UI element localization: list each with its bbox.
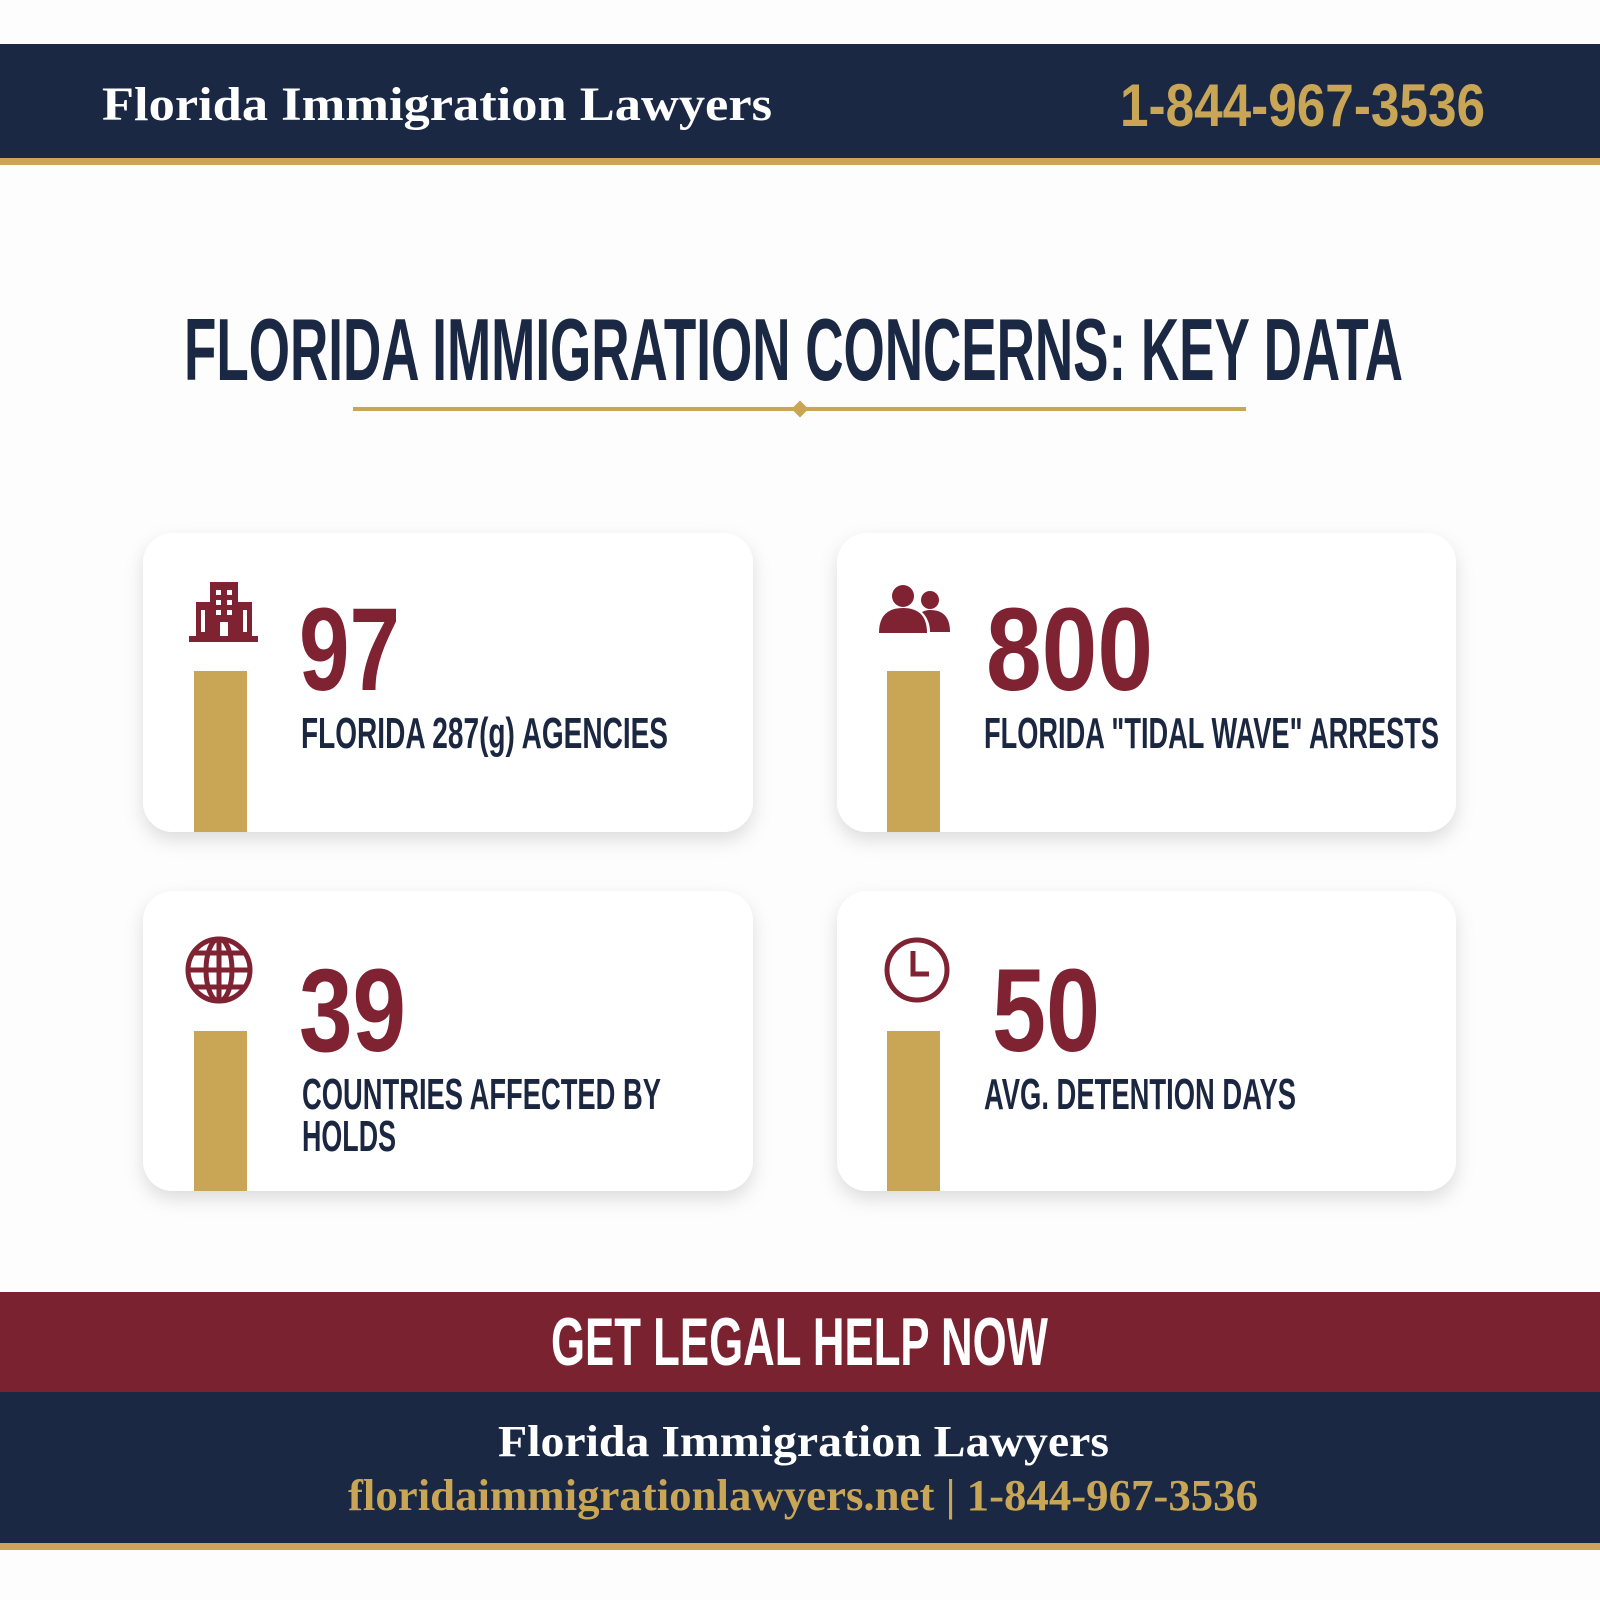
footer contact: floridaimmigrationlawyers.net | 1-844-967-3536 [348, 1471, 1258, 1520]
card: 97 agencies: FLORIDA 287(g) AGENCIES [301, 709, 668, 758]
card: 39 countries [143, 891, 753, 1191]
card: 39 countries: COUNTRIES AFFECTED BY [302, 1070, 661, 1119]
card: 50 days [837, 891, 1456, 1191]
card: 39 countries: HOLDS [302, 1112, 396, 1161]
footer firm name: Florida Immigration Lawyers [498, 1417, 1109, 1466]
header bar [0, 44, 1600, 165]
card: 50 days: 50 [992, 945, 1100, 1077]
call to action band: GET LEGAL HELP NOW [551, 1304, 1049, 1380]
icon: people [879, 585, 950, 633]
card: 97 agencies: 97 [299, 584, 400, 716]
header phone: 1-844-967-3536 [1120, 72, 1485, 139]
card: 800 arrests [837, 533, 1456, 832]
icon: building [189, 582, 258, 642]
footer [0, 1392, 1600, 1550]
card: 50 days: AVG. DETENTION DAYS [984, 1070, 1296, 1119]
card: 39 countries: 39 [299, 945, 406, 1077]
icon: globe [188, 939, 250, 1001]
card: 97 agencies [143, 533, 753, 832]
call to action band [0, 1292, 1600, 1392]
card: 800 arrests: 800 [986, 584, 1153, 716]
icon: clock [887, 940, 947, 1000]
header firm name: Florida Immigration Lawyers [102, 78, 772, 131]
